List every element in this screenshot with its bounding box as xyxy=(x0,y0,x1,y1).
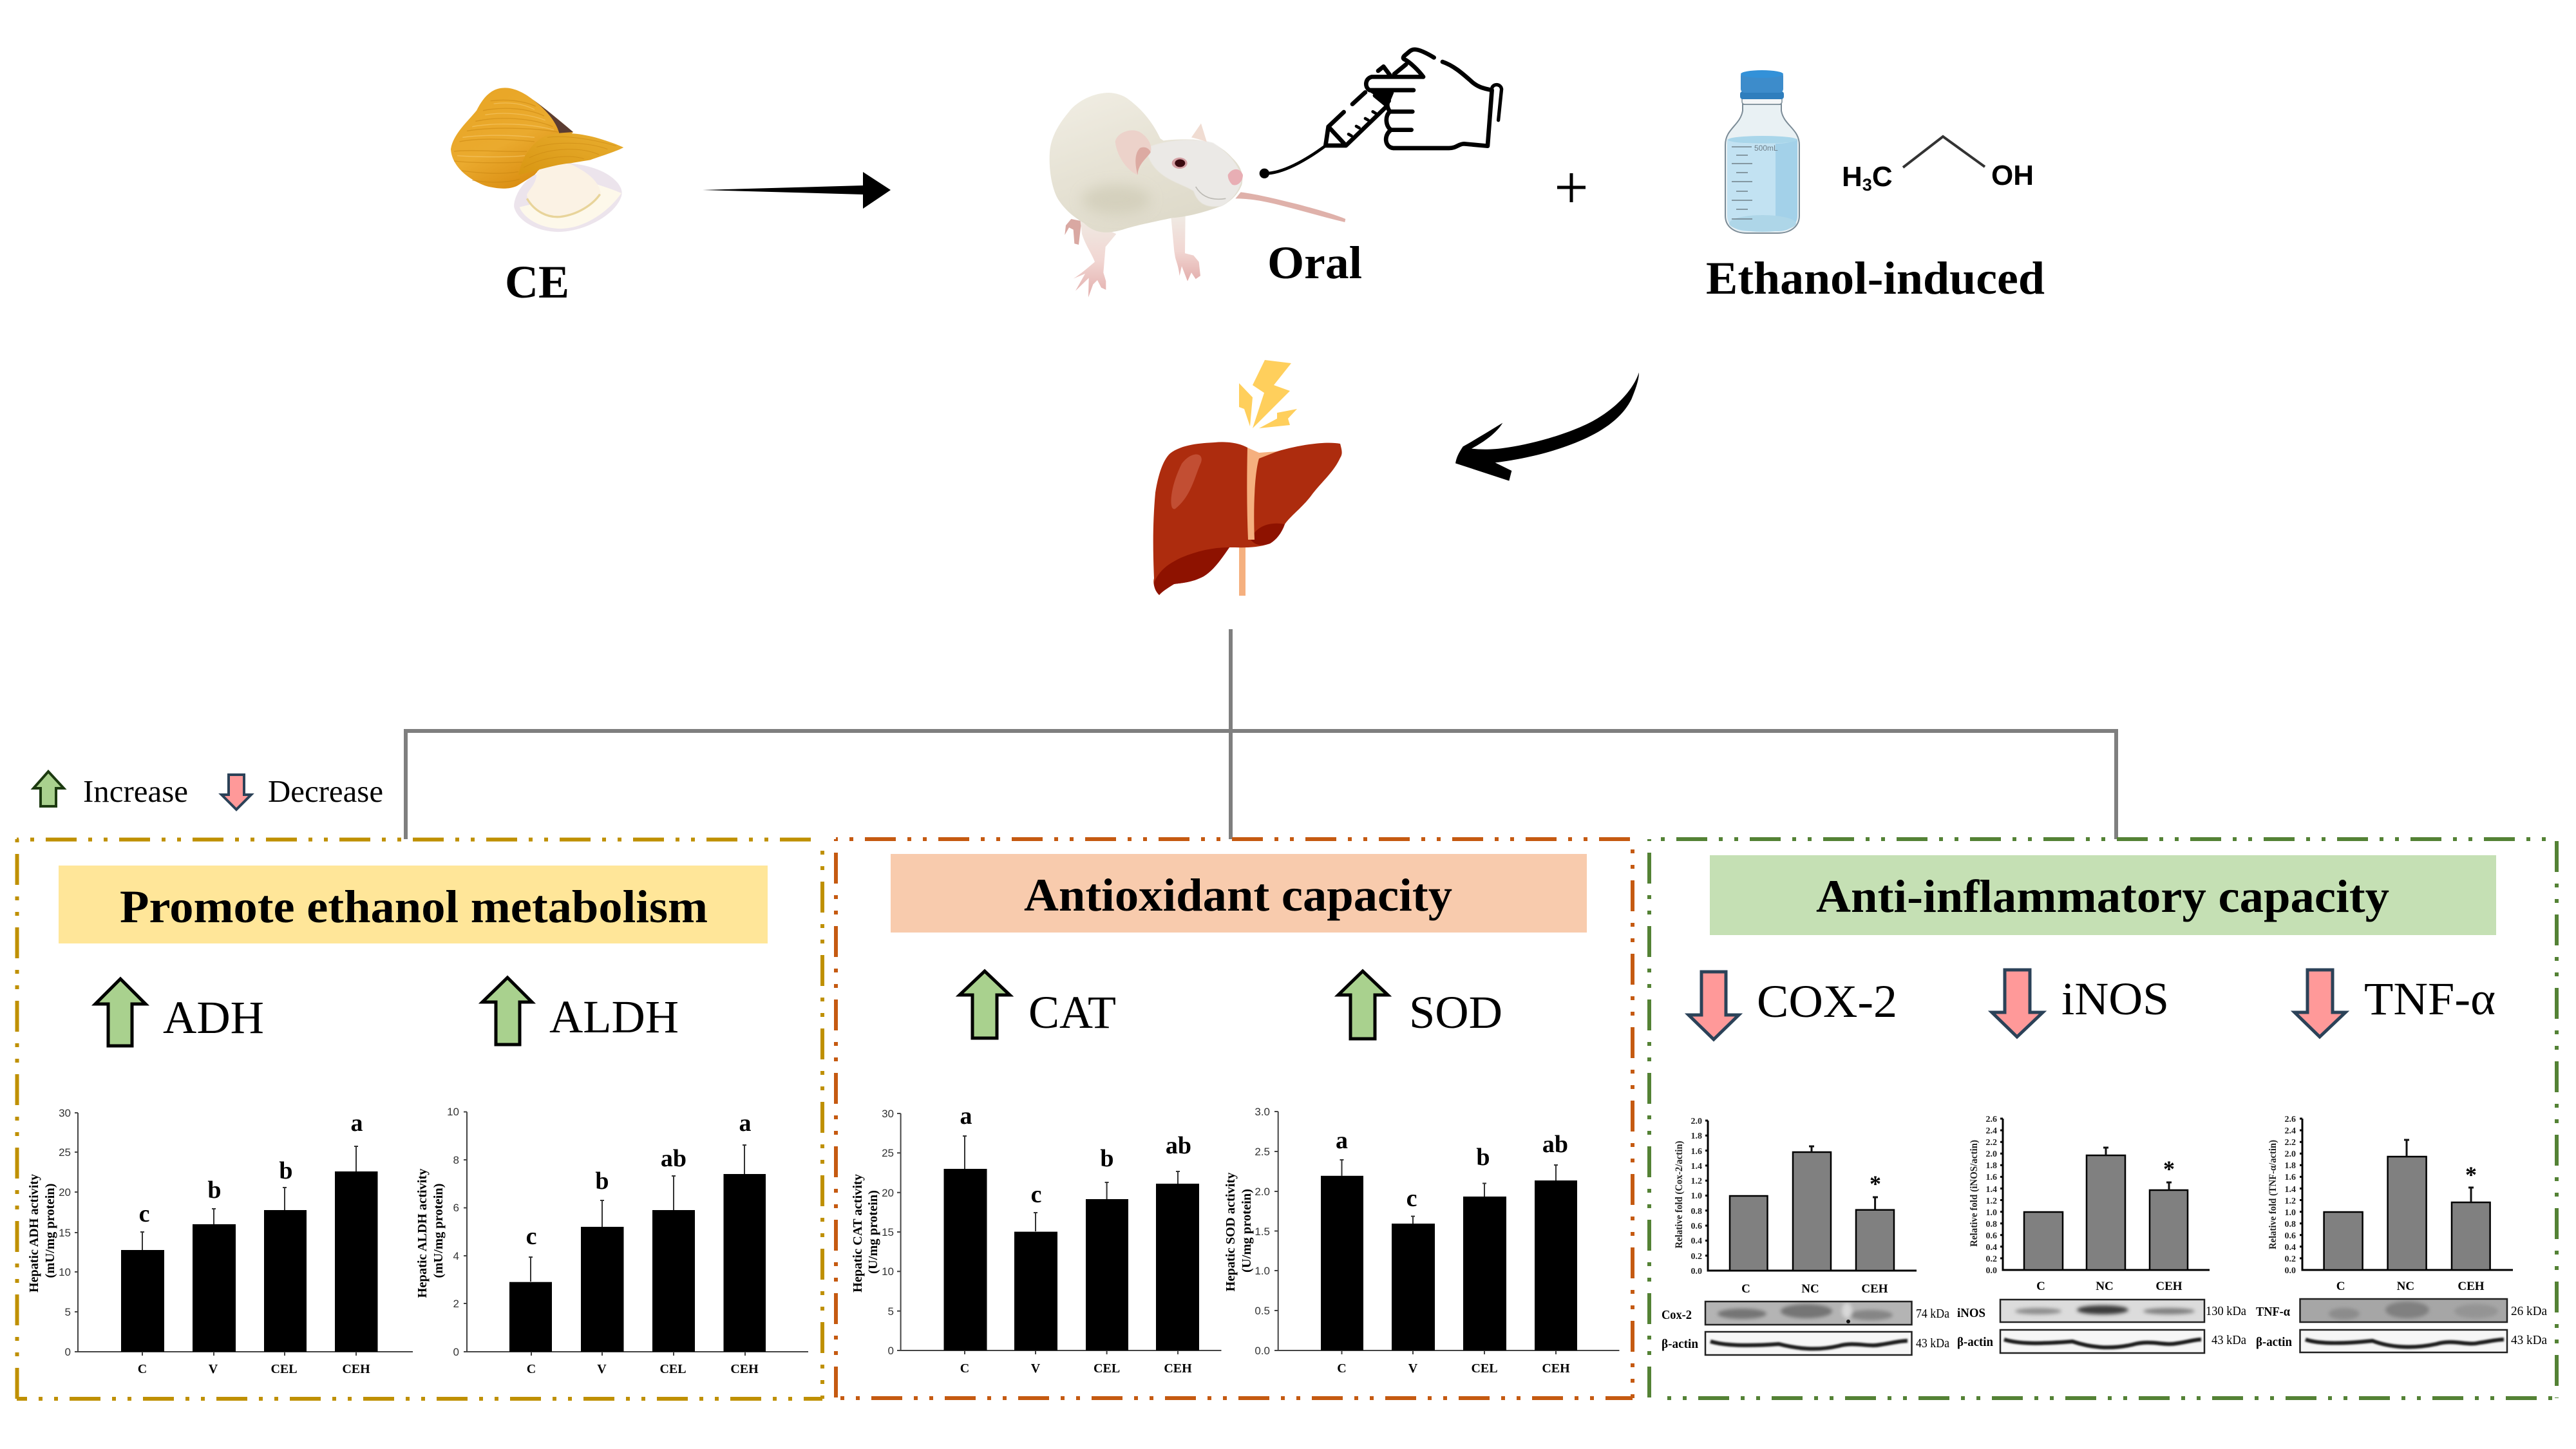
chemical structure: ethanol: C xyxy=(1872,161,1893,193)
icon: ethanol bottle xyxy=(1725,70,1799,233)
bar chart: iNOS relative fold: 0.8 xyxy=(1986,1220,1997,1229)
bar chart: iNOS relative fold: CEH xyxy=(2155,1280,2183,1293)
bar chart: Cox-2 relative fold: Relative fold (Cox-2/actin) xyxy=(1674,1141,1685,1248)
label: iNOS: iNOS xyxy=(2061,973,2169,1025)
icon: lightning xyxy=(1239,360,1297,428)
icon: clam shell xyxy=(451,88,623,232)
bar chart: iNOS relative fold: 0.0 xyxy=(1986,1266,1997,1276)
legend xyxy=(33,772,383,810)
icon: increase arrow xyxy=(33,772,64,806)
icon: rat xyxy=(1050,93,1345,298)
western blot: iNOS: 130 kDa xyxy=(2206,1304,2246,1318)
bar chart: iNOS relative fold: 1.6 xyxy=(1986,1173,1997,1182)
label: COX-2: COX-2 xyxy=(1757,976,1897,1027)
label: TNF-α: TNF-α xyxy=(2364,973,2496,1025)
bar chart: hepatic CAT activity: 10 xyxy=(882,1265,894,1278)
bar chart: hepatic SOD activity: 0.5 xyxy=(1255,1305,1270,1317)
bar chart: hepatic SOD activity: CEH xyxy=(1542,1361,1570,1376)
bar chart: hepatic ALDH activity: (mU/mg protein) xyxy=(431,1184,446,1278)
panel: promote ethanol metabolism xyxy=(17,839,822,1399)
bar chart: hepatic CAT activity: b xyxy=(1100,1145,1114,1172)
bar chart: hepatic ALDH activity: CEH xyxy=(730,1362,759,1376)
bar chart: TNF-α relative fold: Relative fold (TNF-α/actin) xyxy=(2268,1140,2278,1249)
bar chart: hepatic ADH activity: c xyxy=(139,1200,149,1227)
bar chart: iNOS relative fold: 0.4 xyxy=(1986,1243,1997,1253)
bar chart: Cox-2 relative fold: CEH xyxy=(1861,1282,1888,1296)
chemical structure: ethanol: 3 xyxy=(1862,175,1872,194)
bar chart: hepatic SOD activity: C xyxy=(1337,1361,1347,1376)
bar chart: TNF-α relative fold: 1.2 xyxy=(2285,1197,2296,1206)
bar chart: TNF-α relative fold: NC xyxy=(2397,1280,2414,1293)
bar chart: TNF-α relative fold: 1.6 xyxy=(2285,1173,2296,1182)
bar chart: hepatic SOD activity: 0.0 xyxy=(1255,1345,1270,1357)
bar chart: hepatic CAT activity: 25 xyxy=(882,1147,894,1159)
bar chart: iNOS relative fold: 2.6 xyxy=(1986,1115,1997,1124)
chemical structure: ethanol: H xyxy=(1842,161,1862,193)
bar chart: Cox-2 relative fold: 1.0 xyxy=(1691,1191,1702,1201)
bar chart: iNOS relative fold: 2.0 xyxy=(1986,1150,1997,1159)
bar chart: TNF-α relative fold: 0.2 xyxy=(2285,1255,2296,1264)
bar chart: hepatic SOD activity: ab xyxy=(1542,1131,1568,1158)
bar chart: iNOS relative fold: 0.6 xyxy=(1986,1231,1997,1241)
bar chart: iNOS relative fold: 1.0 xyxy=(1986,1208,1997,1218)
bar chart: hepatic CAT activity: 15 xyxy=(882,1226,894,1238)
bar chart: hepatic ALDH activity: 2 xyxy=(453,1298,459,1310)
legend text: Increase: Increase xyxy=(83,773,188,809)
bar chart: hepatic ADH activity: 5 xyxy=(65,1306,71,1318)
bar chart: hepatic ADH activity: 15 xyxy=(59,1227,71,1239)
bar chart: TNF-α relative fold: 0.4 xyxy=(2285,1243,2296,1253)
bar chart: hepatic SOD activity: 2.5 xyxy=(1255,1146,1270,1158)
bar chart: hepatic CAT activity: 5 xyxy=(888,1305,894,1318)
heading: promote ethanol metabolism: Promote ethanol metabolism xyxy=(120,881,708,933)
bar chart: hepatic CAT activity: c xyxy=(1031,1181,1041,1208)
bar chart: hepatic ADH activity: 10 xyxy=(59,1266,71,1278)
western blot: TNF-α: β-actin xyxy=(2256,1335,2292,1349)
heading: anti-inflammatory capacity: Anti-inflammatory capacity xyxy=(1816,871,2389,922)
western blot: iNOS: 43 kDa xyxy=(2211,1333,2246,1347)
western blot: iNOS: iNOS xyxy=(1957,1306,1985,1320)
bar chart: Cox-2 relative fold: 0.4 xyxy=(1691,1236,1702,1246)
bar chart: iNOS relative fold: 1.8 xyxy=(1986,1161,1997,1171)
bar chart: hepatic SOD activity: b xyxy=(1476,1144,1490,1171)
bar chart: hepatic ADH activity xyxy=(27,1107,413,1376)
label: ALDH: ALDH xyxy=(549,991,679,1043)
bar chart: hepatic ALDH activity: C xyxy=(527,1362,536,1376)
bar chart: hepatic ADH activity: 0 xyxy=(65,1346,71,1358)
bar chart: hepatic CAT activity: 30 xyxy=(882,1108,894,1120)
bar chart: Cox-2 relative fold: C xyxy=(1741,1282,1750,1296)
bar chart: TNF-α relative fold: * xyxy=(2465,1162,2477,1188)
bar chart: hepatic ADH activity: Hepatic ADH activity xyxy=(27,1174,41,1293)
bar chart: Cox-2 relative fold: 0.6 xyxy=(1691,1222,1702,1231)
bar chart: hepatic SOD activity: (U/mg protein) xyxy=(1240,1189,1254,1273)
western blot: Cox-2 xyxy=(1662,1302,1949,1355)
bar chart: hepatic ALDH activity: 4 xyxy=(453,1250,459,1262)
western blot: Cox-2: 43 kDa xyxy=(1916,1336,1949,1350)
bar chart: hepatic ADH activity: C xyxy=(138,1362,147,1376)
panel: antioxidant capacity xyxy=(836,839,1633,1398)
bar chart: hepatic CAT activity: CEH xyxy=(1164,1361,1192,1376)
icon: ethanol bottle: 500mL xyxy=(1754,144,1778,153)
bar chart: TNF-α relative fold: 2.4 xyxy=(2285,1126,2296,1136)
bar chart: hepatic SOD activity: Hepatic SOD activity xyxy=(1224,1172,1238,1292)
label: CAT: CAT xyxy=(1028,987,1116,1038)
bar chart: Cox-2 relative fold: 0.2 xyxy=(1691,1252,1702,1262)
bar chart: iNOS relative fold: NC xyxy=(2096,1280,2114,1293)
bar chart: hepatic SOD activity: 2.0 xyxy=(1255,1186,1270,1198)
bar chart: hepatic ALDH activity: c xyxy=(526,1223,536,1250)
bar chart: hepatic ALDH activity: Hepatic ALDH activity xyxy=(415,1168,430,1298)
bar chart: hepatic ALDH activity: V xyxy=(597,1362,607,1376)
western blot: TNF-α: 43 kDa xyxy=(2511,1333,2547,1347)
bar chart: Cox-2 relative fold: 1.2 xyxy=(1691,1177,1702,1186)
bar chart: TNF-α relative fold: 1.0 xyxy=(2285,1208,2296,1218)
bar chart: Cox-2 relative fold: 1.8 xyxy=(1691,1132,1702,1141)
bar chart: hepatic CAT activity: (U/mg protein) xyxy=(866,1190,880,1274)
western blot: Cox-2: 74 kDa xyxy=(1916,1307,1949,1321)
bar chart: hepatic ALDH activity: b xyxy=(595,1168,609,1195)
bar chart: hepatic ADH activity: 20 xyxy=(59,1186,71,1198)
connector lines xyxy=(406,629,2116,839)
bar chart: Cox-2 relative fold: 0.8 xyxy=(1691,1207,1702,1217)
western blot: iNOS: β-actin xyxy=(1957,1335,1993,1349)
heading: anti-inflammatory capacity xyxy=(1710,855,2496,935)
label: Oral: Oral xyxy=(1267,237,1362,289)
bar chart: Cox-2 relative fold: NC xyxy=(1801,1282,1819,1296)
bar chart: hepatic CAT activity: 0 xyxy=(888,1345,894,1357)
bar chart: iNOS relative fold: 1.2 xyxy=(1986,1197,1997,1206)
bar chart: Cox-2 relative fold: 2.0 xyxy=(1691,1117,1702,1126)
icon: ADH up arrow xyxy=(95,979,146,1046)
bar chart: hepatic CAT activity: a xyxy=(960,1103,972,1130)
western blot: TNF-α: 26 kDa xyxy=(2511,1304,2547,1318)
bar chart: TNF-α relative fold: 1.8 xyxy=(2285,1161,2296,1171)
bar chart: hepatic ADH activity: CEL xyxy=(270,1362,298,1376)
bar chart: hepatic CAT activity: C xyxy=(960,1361,969,1376)
western blot: TNF-α: TNF-α xyxy=(2256,1305,2290,1319)
bar chart: hepatic ALDH activity: CEL xyxy=(659,1362,687,1376)
bar chart: TNF-α relative fold: 0.6 xyxy=(2285,1231,2296,1241)
icon: ALDH up arrow xyxy=(482,978,532,1045)
western blot: iNOS xyxy=(1957,1300,2246,1353)
western blot: TNF-α xyxy=(2256,1299,2547,1352)
heading: antioxidant capacity: Antioxidant capacity xyxy=(1024,869,1452,921)
western blot: Cox-2: Cox-2 xyxy=(1662,1308,1692,1322)
bar chart: Cox-2 relative fold: 1.6 xyxy=(1691,1147,1702,1157)
label: SOD: SOD xyxy=(1409,987,1502,1038)
bar chart: TNF-α relative fold: C xyxy=(2336,1280,2345,1293)
bar chart: hepatic ALDH activity: 8 xyxy=(453,1154,459,1166)
icon: COX-2 down arrow xyxy=(1689,972,1739,1039)
bar chart: Cox-2 relative fold: 0.0 xyxy=(1691,1267,1702,1276)
icon: liver xyxy=(1153,442,1342,596)
western blot: Cox-2: β-actin xyxy=(1662,1337,1698,1351)
heading: antioxidant capacity xyxy=(891,854,1587,933)
bar chart: Cox-2 relative fold xyxy=(1674,1117,1917,1296)
bar chart: hepatic ADH activity: b xyxy=(279,1157,293,1184)
bar chart: hepatic SOD activity: a xyxy=(1336,1127,1348,1154)
bar chart: iNOS relative fold: 0.2 xyxy=(1986,1255,1997,1264)
bar chart: hepatic CAT activity: V xyxy=(1031,1361,1041,1376)
icon: syringe and hand xyxy=(1261,50,1502,177)
bar chart: TNF-α relative fold: CEH xyxy=(2458,1280,2485,1293)
bar chart: hepatic ADH activity: 30 xyxy=(59,1107,71,1119)
icon: iNOS down arrow xyxy=(1992,970,2043,1037)
bar chart: TNF-α relative fold: 2.0 xyxy=(2285,1150,2296,1159)
bar chart: hepatic ALDH activity: a xyxy=(739,1110,751,1137)
bar chart: hepatic SOD activity: 1.5 xyxy=(1255,1226,1270,1238)
legend text: Decrease: Decrease xyxy=(268,773,383,809)
bar chart: TNF-α relative fold: 0.8 xyxy=(2285,1220,2296,1229)
bar chart: hepatic CAT activity: CEL xyxy=(1094,1361,1120,1376)
arrow: CE to rat xyxy=(703,172,891,209)
bar chart: iNOS relative fold: 2.2 xyxy=(1986,1138,1997,1148)
bar chart: iNOS relative fold: * xyxy=(2163,1156,2175,1182)
bar chart: hepatic SOD activity: c xyxy=(1406,1185,1417,1212)
bar chart: hepatic ADH activity: a xyxy=(350,1110,363,1137)
bar chart: hepatic ADH activity: (mU/mg protein) xyxy=(43,1184,57,1278)
icon: CAT up arrow xyxy=(960,971,1010,1038)
bar chart: iNOS relative fold: Relative fold (iNOS/actin) xyxy=(1969,1140,1980,1247)
bar chart: hepatic CAT activity: 20 xyxy=(882,1187,894,1199)
heading: promote ethanol metabolism xyxy=(59,866,768,943)
label: Ethanol-induced: Ethanol-induced xyxy=(1706,252,2045,304)
bar chart: hepatic SOD activity xyxy=(1224,1106,1619,1376)
bar chart: hepatic ALDH activity: 10 xyxy=(447,1106,459,1118)
bar chart: hepatic ALDH activity: ab xyxy=(661,1145,687,1172)
bar chart: Cox-2 relative fold: 1.4 xyxy=(1691,1162,1702,1171)
bar chart: hepatic SOD activity: V xyxy=(1408,1361,1418,1376)
bar chart: TNF-α relative fold: 2.6 xyxy=(2285,1115,2296,1124)
label: ADH: ADH xyxy=(163,992,264,1043)
bar chart: hepatic ALDH activity: 0 xyxy=(453,1346,459,1358)
bar chart: TNF-α relative fold xyxy=(2268,1115,2513,1293)
bar chart: hepatic ADH activity: CEH xyxy=(342,1362,370,1376)
chemical structure: ethanol: OH xyxy=(1991,160,2034,191)
bar chart: iNOS relative fold: 2.4 xyxy=(1986,1126,1997,1136)
bar chart: hepatic ALDH activity: 6 xyxy=(453,1202,459,1214)
bar chart: hepatic SOD activity: CEL xyxy=(1471,1361,1498,1376)
bar chart: hepatic ADH activity: b xyxy=(207,1177,222,1204)
icon: TNF-α down arrow xyxy=(2295,970,2345,1037)
label: CE: CE xyxy=(505,256,569,308)
bar chart: hepatic ADH activity: 25 xyxy=(59,1146,71,1159)
bar chart: hepatic ADH activity: V xyxy=(209,1362,218,1376)
plus sign xyxy=(1557,173,1586,202)
bar chart: hepatic ALDH activity xyxy=(415,1106,808,1376)
icon: decrease arrow xyxy=(222,775,251,810)
bar chart: iNOS relative fold: C xyxy=(2036,1280,2045,1293)
bar chart: hepatic CAT activity: Hepatic CAT activity xyxy=(851,1174,865,1293)
bar chart: iNOS relative fold: 1.4 xyxy=(1986,1185,1997,1195)
bar chart: hepatic SOD activity: 3.0 xyxy=(1255,1106,1270,1118)
bar chart: Cox-2 relative fold: * xyxy=(1870,1171,1881,1197)
arrow: ethanol to liver xyxy=(1455,372,1639,481)
bar chart: TNF-α relative fold: 0.0 xyxy=(2285,1266,2296,1276)
bar chart: hepatic SOD activity: 1.0 xyxy=(1255,1265,1270,1277)
icon: SOD up arrow xyxy=(1338,971,1388,1039)
chemical structure: ethanol xyxy=(1842,137,2034,194)
bar chart: TNF-α relative fold: 2.2 xyxy=(2285,1138,2296,1148)
bar chart: hepatic CAT activity xyxy=(851,1103,1221,1376)
bar chart: iNOS relative fold xyxy=(1969,1115,2210,1293)
bar chart: TNF-α relative fold: 1.4 xyxy=(2285,1185,2296,1195)
bar chart: hepatic CAT activity: ab xyxy=(1166,1132,1191,1159)
panel: anti-inflammatory capacity xyxy=(1649,839,2557,1398)
